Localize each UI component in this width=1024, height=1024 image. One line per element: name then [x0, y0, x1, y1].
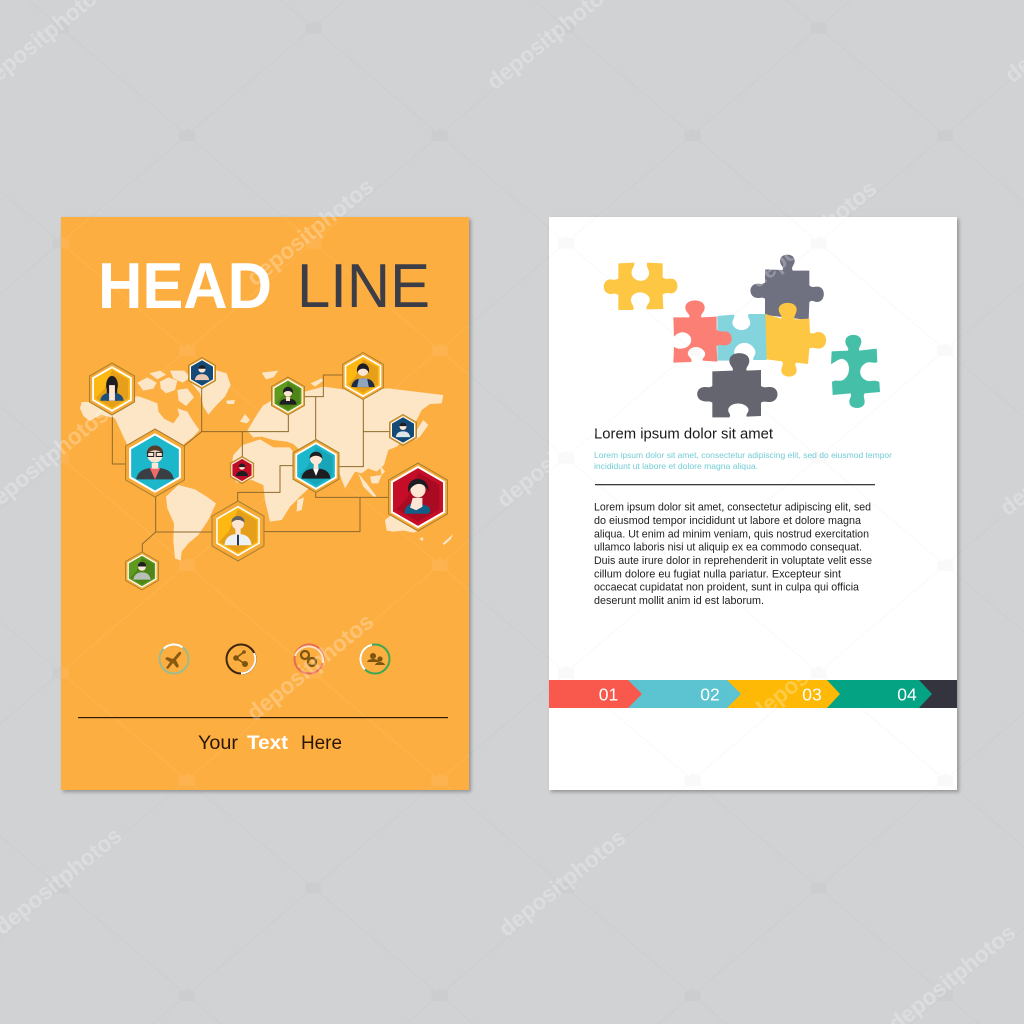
body text: deserunt mollit anim id est laborum.	[594, 595, 764, 607]
body text: aliqua. Ut enim ad minim veniam, quis nostrud exercitation	[594, 528, 869, 540]
teal intro text: incididunt ut labore et dolore magna aliqua.	[594, 461, 758, 471]
footer text	[198, 732, 342, 754]
puzzle: dark bottom piece	[697, 353, 777, 417]
puzzle: yellow loose piece	[604, 263, 677, 310]
hexagon: big red woman	[389, 463, 447, 531]
subheading: Lorem ipsum dolor sit amet	[594, 426, 773, 442]
numbered arrow bar: 01	[599, 684, 618, 704]
hexagon: green man	[126, 552, 158, 590]
icon: plane in ring	[160, 644, 188, 674]
footer text: Text	[247, 732, 289, 754]
panel: white inner page	[549, 217, 959, 792]
puzzle: teal piece	[831, 335, 880, 408]
hexagon: yellow woman	[89, 363, 135, 415]
headline: HEAD	[98, 249, 272, 322]
puzzle: gray top piece	[750, 255, 824, 320]
footer text: Here	[301, 732, 342, 754]
divider	[595, 484, 875, 485]
headline	[98, 249, 430, 322]
watermark text: depositphotos	[746, 608, 882, 726]
puzzle: yellow center piece	[765, 303, 826, 377]
watermark text: depositphotos	[492, 395, 628, 513]
footer divider	[78, 717, 448, 718]
body text: do eiusmod tempor incididunt ut labore et dolore magna	[594, 515, 861, 527]
watermark text: depositphotos	[745, 175, 881, 293]
body text: occaecat cupidatat non proident, sunt in culpa qui officia	[594, 582, 859, 594]
hexagon: teal man in tuxedo	[293, 440, 339, 492]
hexagon: small red person	[230, 456, 254, 484]
headline: LINE	[297, 252, 430, 321]
numbered arrow bar	[549, 680, 957, 708]
puzzle pieces	[604, 255, 880, 417]
teal intro text	[594, 450, 892, 471]
hexagon: yellow woman with glasses	[343, 352, 383, 400]
teal intro text: Lorem ipsum dolor sit amet, consectetur adipiscing elit, sed do eiusmod tempor	[594, 450, 892, 460]
numbered arrow bar: 03	[802, 684, 822, 704]
panel: orange cover page	[61, 217, 471, 792]
body text: Duis aute irure dolor in reprehenderit in voluptate velit esse	[594, 555, 872, 567]
world map network	[80, 352, 453, 590]
hexagon: yellow man	[212, 501, 264, 561]
numbered arrow bar: 04	[897, 684, 917, 704]
hexagon: navy right	[390, 414, 416, 446]
icon: links in ring	[294, 644, 324, 674]
body text: ullamco laboris nisi ut aliquip ex ea commodo consequat.	[594, 542, 862, 554]
watermark text: depositphotos	[242, 608, 378, 726]
body text: cillum dolore eu fugiat nulla pariatur. Excepteur sint	[594, 568, 841, 580]
body text: Lorem ipsum dolor sit amet, consectetur adipiscing elit, sed	[594, 502, 871, 514]
puzzle: light blue piece	[717, 314, 782, 361]
icon: people in ring	[360, 644, 390, 674]
footer text: Your	[198, 732, 239, 754]
puzzle: salmon piece	[673, 300, 732, 363]
hexagon: navy person	[189, 358, 215, 388]
icon: share in ring	[226, 644, 256, 674]
numbered arrow bar: 02	[700, 684, 720, 704]
watermark text: depositphotos	[494, 824, 630, 942]
watermark text: depositphotos	[242, 173, 378, 291]
hexagon: teal man with glasses	[126, 429, 184, 497]
hexagon: green woman	[272, 377, 304, 415]
world map	[80, 367, 453, 561]
body text	[594, 502, 872, 607]
connector lines	[112, 375, 390, 552]
